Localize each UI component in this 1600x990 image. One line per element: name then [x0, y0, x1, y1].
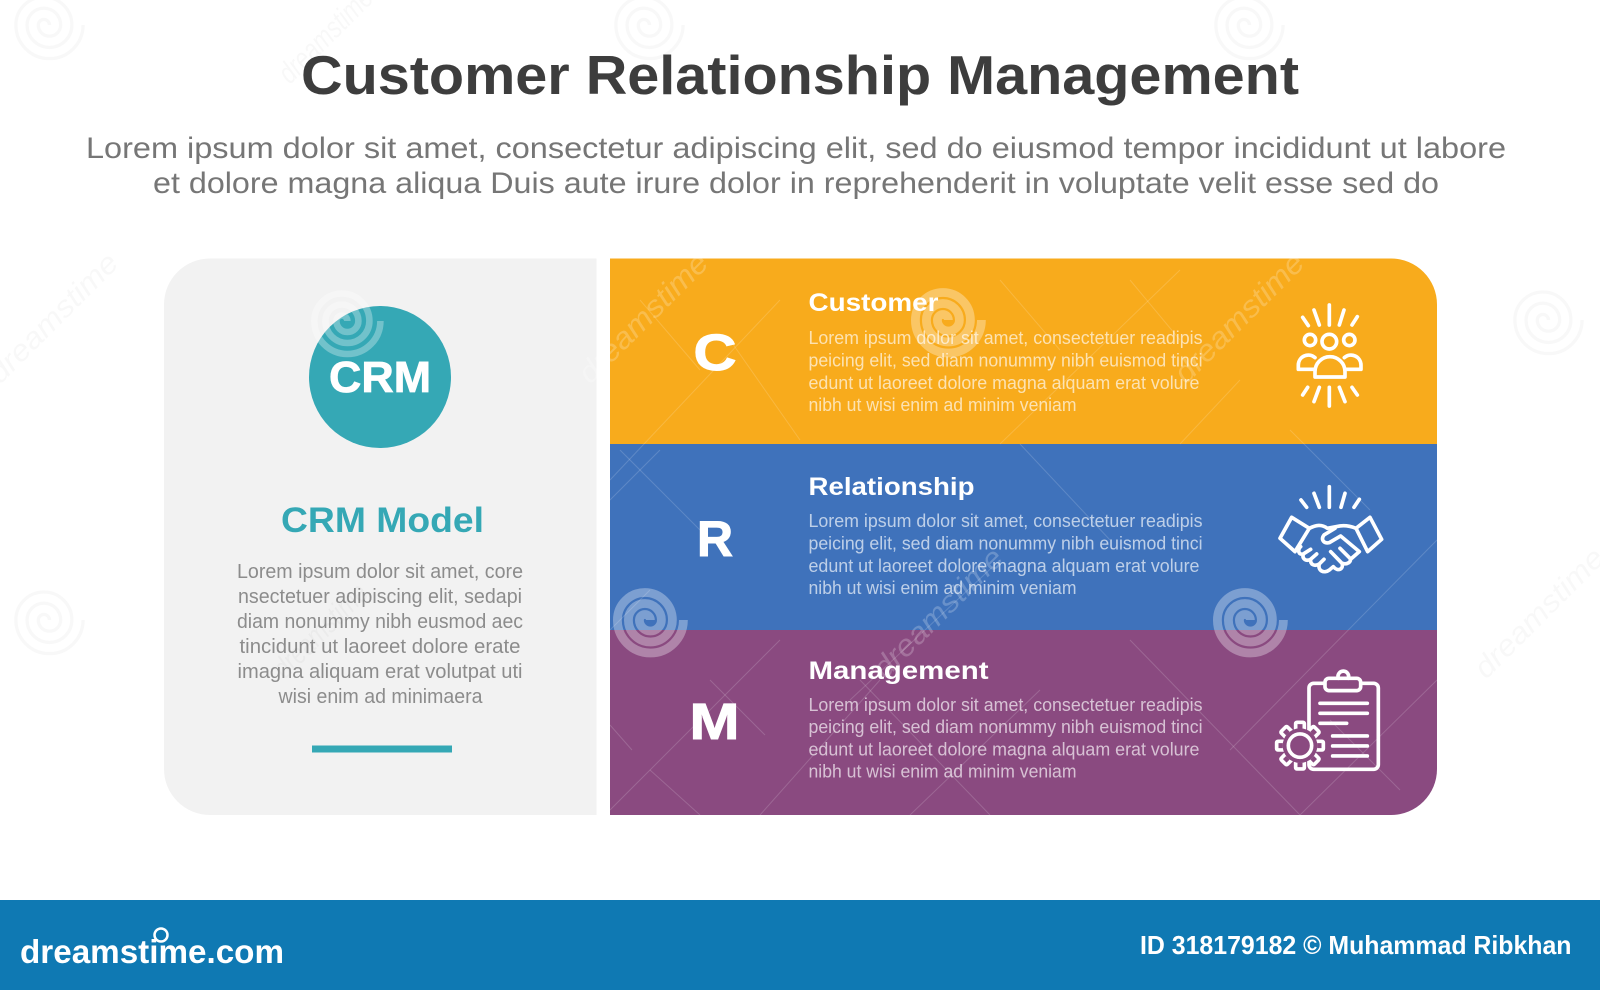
subtitle	[86, 132, 1506, 200]
watermark overlay: dreamstime	[867, 541, 1010, 685]
subtitle: Lorem ipsum dolor sit amet, consectetur adipiscing elit, sed do eiusmod tempor incididunt ut labore	[86, 132, 1506, 165]
text block: Customer: edunt ut laoreet dolore magna alquam erat volure	[808, 373, 1200, 393]
panel: CRM model	[164, 258, 596, 815]
watermark overlay: dreamstime	[267, 577, 375, 685]
heading: CRM Model: CRM Model	[281, 501, 484, 540]
text block: Relationship: nibh ut wisi enim ad minim veniam	[808, 578, 1076, 598]
icon: CRM circle	[309, 294, 451, 448]
text block: Management	[808, 695, 1202, 782]
watermark overlay: dreamstime	[1168, 246, 1311, 390]
text block: CRM model description: Lorem ipsum dolor sit amet, core	[237, 561, 523, 583]
icon: CRM circle: CRM	[329, 353, 431, 402]
letter M: M	[690, 693, 740, 750]
text block: Customer: Lorem ipsum dolor sit amet, consectetuer readipis	[808, 328, 1202, 348]
logo: dreamstime: dreamstime.com	[20, 933, 284, 970]
text block: Relationship: edunt ut laoreet dolore magna alquam erat volure	[808, 556, 1200, 576]
letter R: R	[697, 511, 733, 567]
text block: Management: peicing elit, sed diam nonummy nibh euismod tinci	[808, 717, 1202, 737]
icon: customers group	[1298, 305, 1361, 406]
heading: Management: Management	[808, 657, 989, 685]
text block: Management: nibh ut wisi enim ad minim veniam	[808, 762, 1076, 782]
footer bar	[0, 900, 1600, 990]
text block: Customer: peicing elit, sed diam nonummy nibh euismod tinci	[808, 350, 1202, 370]
watermark spirals on background	[16, 0, 1582, 654]
watermark overlay: dreamstime	[1468, 541, 1600, 685]
text block: Relationship: Lorem ipsum dolor sit amet, consectetuer readipis	[808, 511, 1202, 531]
icon: clipboard with gear	[1277, 671, 1378, 769]
text block: CRM model description: tincidunt ut laoreet dolore erate	[240, 636, 520, 658]
watermark overlay	[610, 258, 1437, 815]
text block: CRM model description: nsectetuer adipiscing elit, sedapi	[238, 586, 522, 608]
panel: Management row	[610, 630, 1437, 815]
text block: CRM model description: imagna aliquam erat volutpat uti	[238, 661, 522, 683]
panel: Relationship row	[610, 444, 1437, 630]
text block: CRM model description: diam nonummy nibh eusmod aec	[237, 611, 523, 633]
text block: CRM model description: wisi enim ad minimaera	[278, 686, 483, 708]
credit: ID 318179182 © Muhammad Ribkhan	[1140, 930, 1572, 960]
watermark overlay: dreamstime	[572, 246, 715, 390]
icon: handshake	[1280, 487, 1382, 572]
text block: Relationship	[808, 511, 1202, 598]
letter C: C	[694, 324, 736, 381]
subtitle: et dolore magna aliqua Duis aute irure dolor in reprehenderit in voluptate velit esse sed do	[153, 167, 1439, 200]
text block: Customer	[808, 328, 1202, 415]
title: Customer Relationship Management	[301, 44, 1299, 106]
text block: Relationship: peicing elit, sed diam nonummy nibh euismod tinci	[808, 534, 1202, 554]
accent bar	[312, 746, 452, 752]
text block: Management: edunt ut laoreet dolore magna alquam erat volure	[808, 740, 1200, 760]
heading: Relationship: Relationship	[808, 473, 974, 501]
text block: Management: Lorem ipsum dolor sit amet, consectetuer readipis	[808, 695, 1202, 715]
panel: Customer row	[610, 258, 1437, 444]
heading: Customer: Customer	[808, 289, 939, 317]
text block: CRM model description	[237, 561, 523, 708]
text block: Customer: nibh ut wisi enim ad minim veniam	[808, 395, 1076, 415]
